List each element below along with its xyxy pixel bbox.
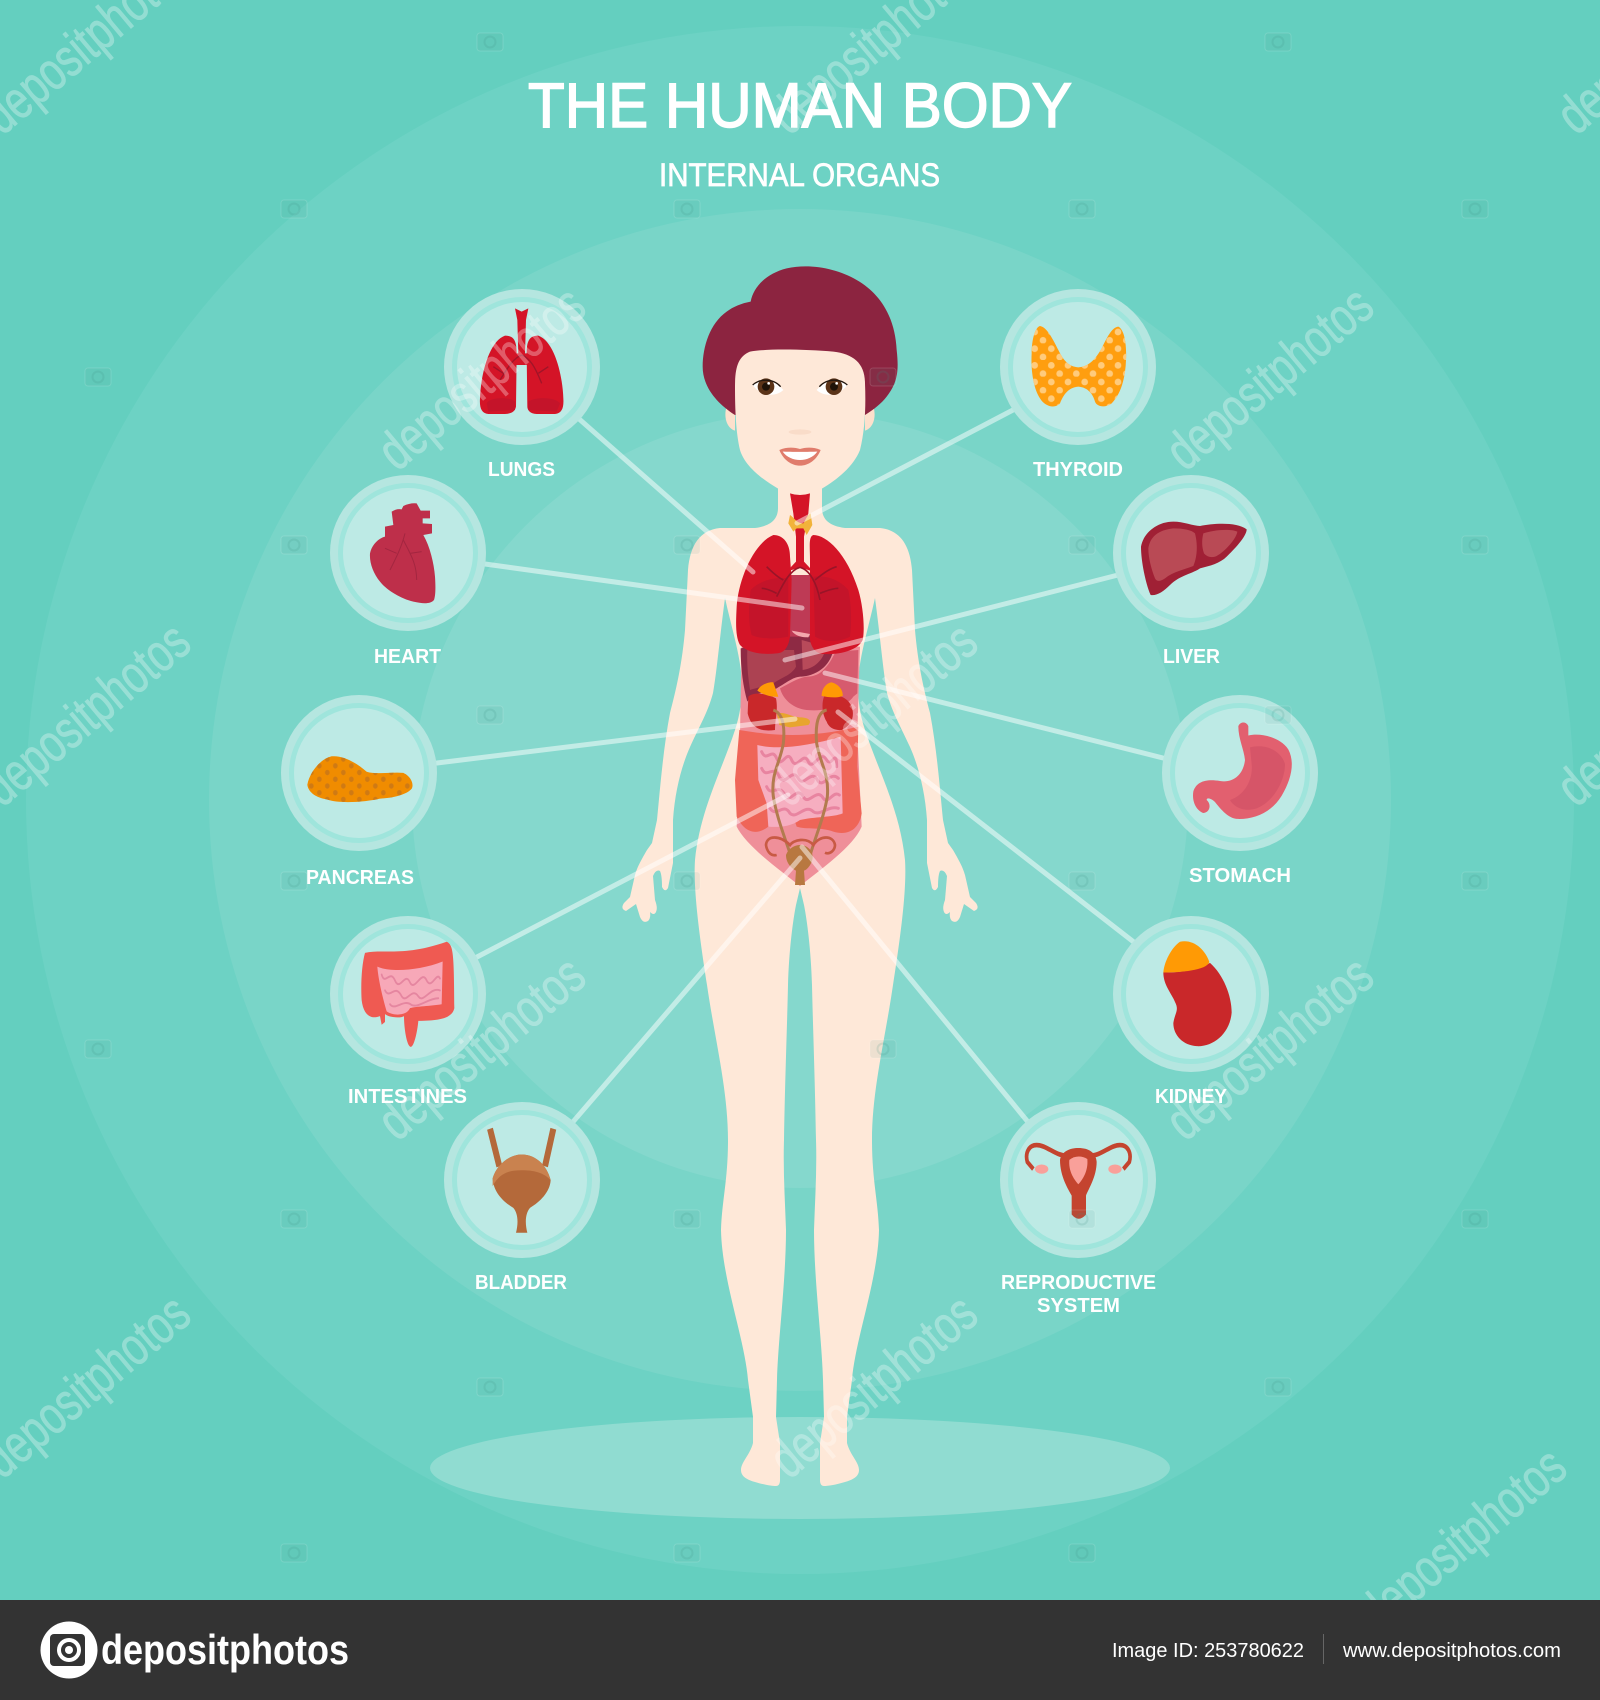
mouth: [779, 448, 821, 466]
label: stomach: STOMACH: [1189, 865, 1291, 887]
connector: heart: [485, 564, 802, 608]
panel: intestines: [330, 916, 486, 1108]
label: reproductive system: REPRODUCTIVE: [1001, 1272, 1156, 1294]
icon: pancreas: [307, 756, 413, 802]
connector: intestines: [477, 795, 788, 957]
website: www.depositphotos.com: [1342, 1640, 1561, 1662]
head and face: [703, 266, 898, 488]
panel: thyroid: [1000, 289, 1156, 481]
label: liver: LIVER: [1163, 646, 1221, 668]
panel: lungs: [444, 289, 600, 481]
icon: bladder: [490, 1129, 553, 1233]
icon: camera logo: [40, 1622, 98, 1678]
icon: heart: [370, 503, 435, 603]
connector: liver: [785, 575, 1118, 660]
abdomen cavity: [737, 647, 862, 886]
adrenal and kidneys: [748, 694, 853, 731]
subtitle: INTERNAL ORGANS: [659, 157, 940, 193]
thyroid: [788, 513, 812, 535]
liver: [741, 637, 833, 702]
icon: kidney: [1163, 941, 1232, 1046]
body silhouette: [622, 480, 978, 1486]
label: kidney: KIDNEY: [1155, 1086, 1228, 1108]
human figure: [622, 266, 978, 1486]
connector: bladder: [572, 858, 800, 1123]
icon: uterus: [1027, 1145, 1130, 1219]
watermark text: depositphotos: [758, 1283, 988, 1490]
eyes: [753, 380, 847, 395]
watermark camera icons: [85, 33, 1488, 1562]
trachea and bronchi: [787, 493, 813, 572]
label: pancreas: PANCREAS: [306, 867, 414, 889]
watermark text: depositphotos: [1154, 945, 1384, 1152]
stomach: [780, 650, 858, 710]
nose: [789, 429, 811, 435]
image id: Image ID: 253780622: [1112, 1640, 1304, 1662]
floor shadow ellipse: [430, 1417, 1170, 1519]
watermark text: depositphotos: [366, 945, 596, 1152]
footer bar: [0, 1600, 1600, 1700]
watermark text: depositphotos: [758, 611, 988, 818]
bladder: [786, 845, 813, 885]
watermark text: depositphotos: [366, 275, 596, 482]
connector: kidney: [838, 712, 1135, 943]
label: reproductive system: SYSTEM: [1037, 1295, 1120, 1317]
panel: stomach: [1162, 695, 1318, 887]
uterus and tubes: [766, 837, 835, 855]
icon: stomach: [1193, 723, 1292, 819]
panel: reproductive system: [1000, 1102, 1156, 1317]
icon: lungs: [480, 308, 563, 414]
panel: kidney: [1113, 916, 1269, 1108]
connector: lungs: [578, 418, 753, 572]
title: THE HUMAN BODY: [528, 71, 1072, 141]
label: heart: HEART: [374, 646, 441, 668]
small intestine: [757, 737, 843, 827]
icon: thyroid: [1031, 326, 1126, 406]
panel: pancreas: [281, 695, 437, 889]
label: thyroid: THYROID: [1033, 459, 1123, 481]
label: bladder: BLADDER: [475, 1272, 568, 1294]
pancreas: [777, 713, 810, 727]
label: intestines: INTESTINES: [348, 1086, 467, 1108]
internal organs: [735, 493, 864, 886]
icon: intestines: [361, 942, 454, 1047]
panel: liver: [1113, 475, 1269, 668]
heart: [792, 575, 810, 637]
connector: stomach: [825, 673, 1163, 758]
lungs: [736, 535, 864, 654]
watermark text: depositphotos: [1154, 275, 1384, 482]
large intestine: [735, 727, 862, 833]
connector: pancreas: [437, 719, 795, 763]
icon: liver: [1141, 522, 1247, 595]
panel: bladder: [444, 1102, 600, 1294]
ureters: [773, 710, 828, 853]
logo wordmark: depositphotos: [101, 1626, 349, 1673]
connector: thyroid: [797, 410, 1013, 523]
connector: reproductive system: [802, 847, 1028, 1122]
mediastinum behind lungs: [788, 575, 812, 650]
label: lungs: LUNGS: [488, 459, 555, 481]
panel: heart: [330, 475, 486, 668]
